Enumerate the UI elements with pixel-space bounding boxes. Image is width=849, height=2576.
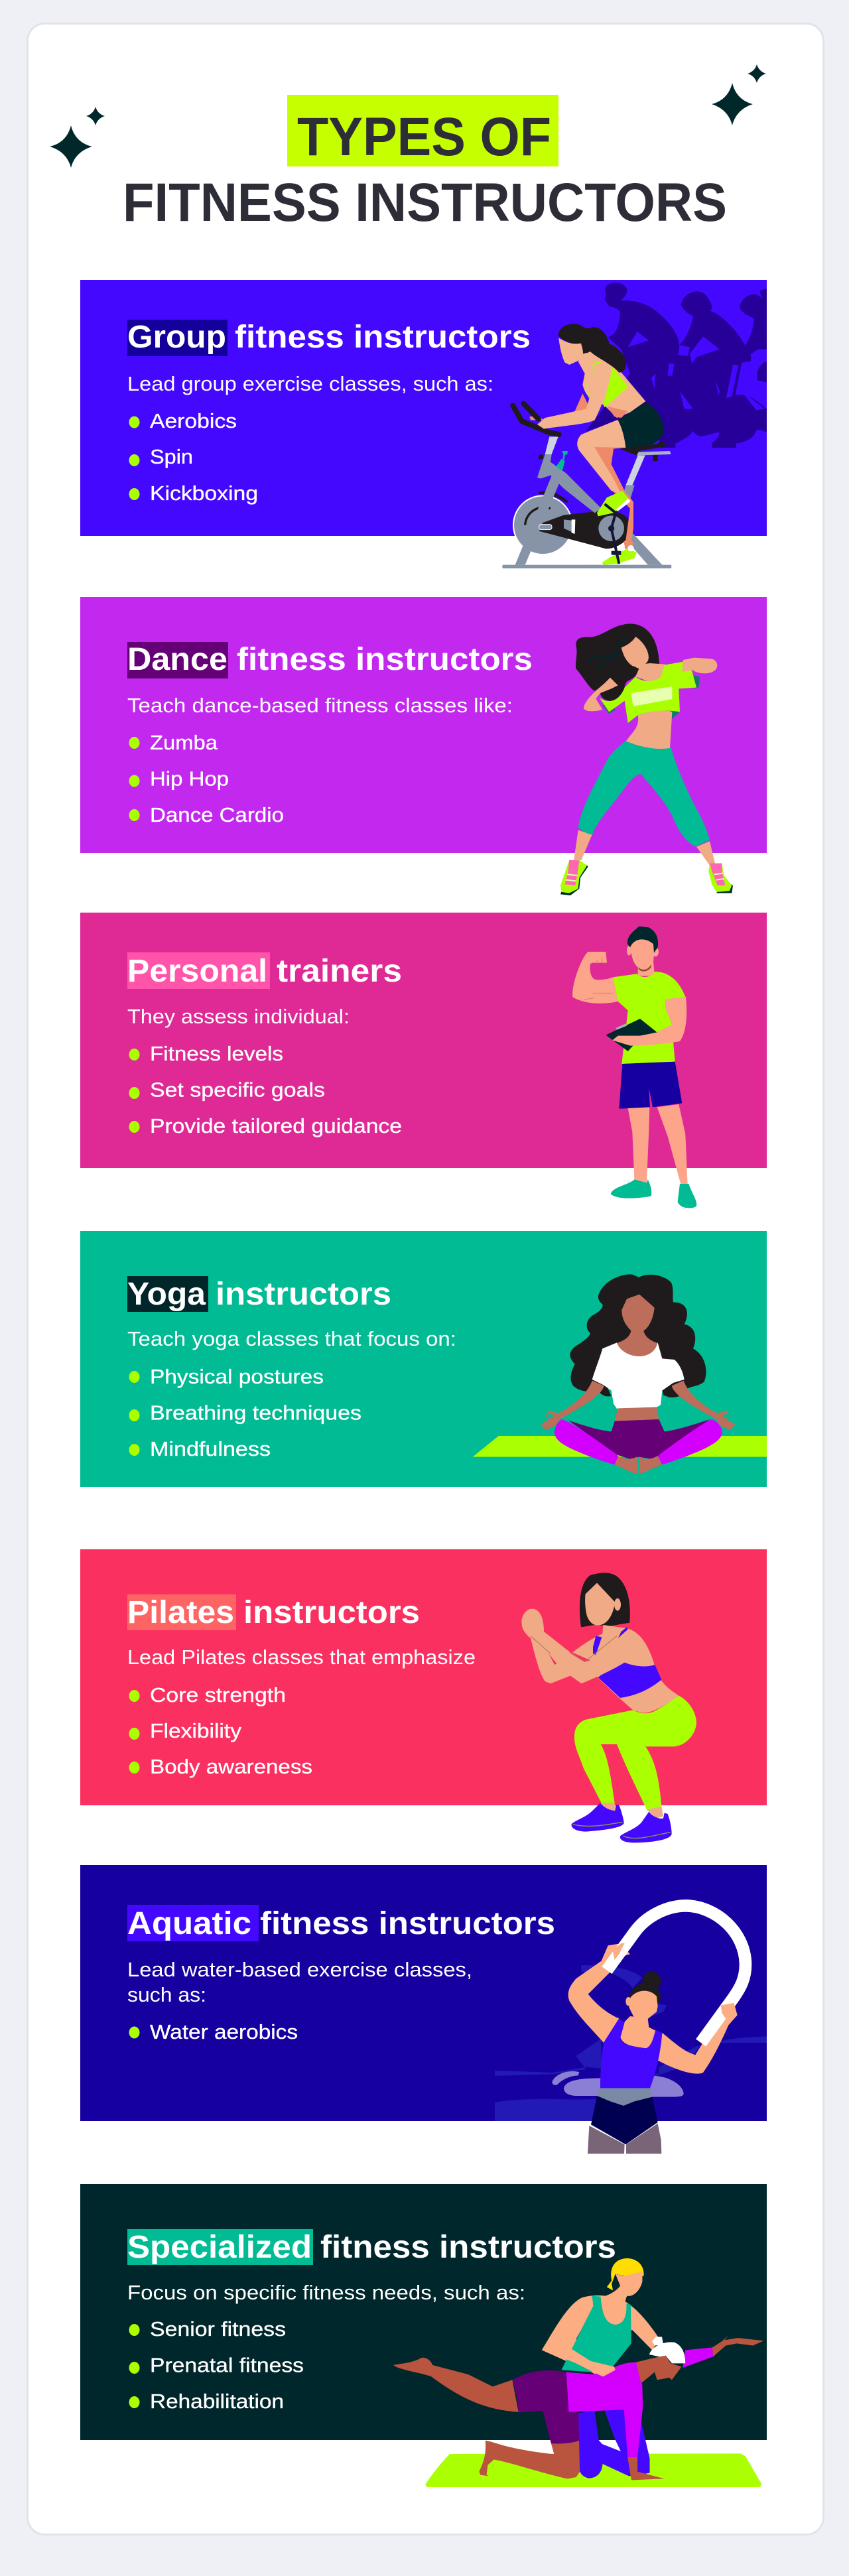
list: Physical postures: [150, 1365, 324, 1388]
list: Fitness levels: [150, 1042, 283, 1065]
heading: [127, 952, 402, 989]
list: Body awareness: [150, 1755, 312, 1778]
illustration: woman on spin bike: [502, 324, 671, 568]
illustration: personal trainer: [572, 927, 696, 1208]
heading: Yoga: [127, 1277, 206, 1312]
icon: sparkles right: [712, 64, 766, 125]
list: Water aerobics: [150, 2020, 298, 2043]
heading: instructors: [216, 1277, 391, 1312]
list: Aerobics: [150, 409, 237, 432]
heading: fitness instructors: [260, 1906, 555, 1941]
heading: fitness instructors: [235, 320, 531, 355]
list: [129, 409, 258, 505]
list: Mindfulness: [150, 1437, 271, 1460]
description: Teach yoga classes that focus on:: [127, 1327, 456, 1350]
list: Zumba: [150, 731, 218, 754]
description: Focus on specific fitness needs, such as:: [127, 2281, 525, 2304]
heading: Pilates: [127, 1595, 234, 1630]
illustration: background cyclist silhouettes: [586, 283, 767, 448]
title: TYPES OF: [297, 107, 551, 167]
heading: Dance: [127, 642, 228, 677]
heading: [127, 1276, 391, 1312]
heading: fitness instructors: [320, 2230, 616, 2265]
heading: [127, 320, 531, 356]
heading: [127, 2229, 616, 2265]
panel: pilates instructors: [80, 1549, 767, 1842]
icon: sparkles left: [50, 107, 105, 168]
list: Dance Cardio: [150, 803, 284, 826]
list: [129, 1042, 402, 1137]
panel: dance fitness instructors: [80, 597, 767, 895]
description: Teach dance-based fitness classes like:: [127, 694, 513, 717]
description: Lead Pilates classes that emphasize: [127, 1645, 476, 1669]
description: They assess individual:: [127, 1005, 350, 1028]
title: FITNESS INSTRUCTORS: [123, 172, 727, 233]
list: [129, 1365, 361, 1460]
heading: [127, 1905, 555, 1941]
illustration: trainer helping senior on mat: [393, 2258, 764, 2487]
list: Breathing techniques: [150, 1401, 361, 1425]
list: [129, 2317, 304, 2413]
list: Flexibility: [150, 1719, 242, 1742]
list: Prenatal fitness: [150, 2353, 304, 2377]
panel: group fitness instructors: [80, 280, 767, 568]
heading: Aquatic: [127, 1906, 251, 1941]
heading: Specialized: [127, 2230, 312, 2265]
heading: Personal: [127, 954, 267, 989]
list: [129, 1683, 312, 1778]
list: Senior fitness: [150, 2317, 286, 2341]
illustration: yoga pose: [473, 1275, 767, 1474]
title: [123, 95, 727, 233]
list: Rehabilitation: [150, 2390, 284, 2413]
heading: trainers: [277, 954, 402, 989]
heading: [127, 642, 533, 678]
panel: specialized fitness instructors: [80, 2184, 767, 2487]
list: [129, 731, 284, 826]
illustration: squat: [521, 1573, 696, 1842]
description: Lead group exercise classes, such as:: [127, 372, 493, 395]
list: Provide tailored guidance: [150, 1114, 402, 1137]
list: Spin: [150, 445, 193, 468]
heading: instructors: [243, 1595, 420, 1630]
list: Kickboxing: [150, 482, 258, 505]
panel: personal trainers: [80, 913, 767, 1208]
list: Set specific goals: [150, 1078, 325, 1101]
heading: [127, 1594, 420, 1630]
illustration: water exercise with pool noodle: [495, 1905, 767, 2154]
description: [127, 1958, 472, 2006]
heading: Group: [127, 320, 226, 355]
panel: yoga instructors: [80, 1231, 767, 1487]
panel: aquatic fitness instructors: [80, 1865, 767, 2154]
description: such as:: [127, 1983, 206, 2006]
list: Hip Hop: [150, 767, 229, 791]
list: Core strength: [150, 1683, 286, 1707]
illustration: dancer: [560, 623, 733, 895]
description: Lead water-based exercise classes,: [127, 1958, 472, 1981]
heading: fitness instructors: [237, 642, 533, 677]
